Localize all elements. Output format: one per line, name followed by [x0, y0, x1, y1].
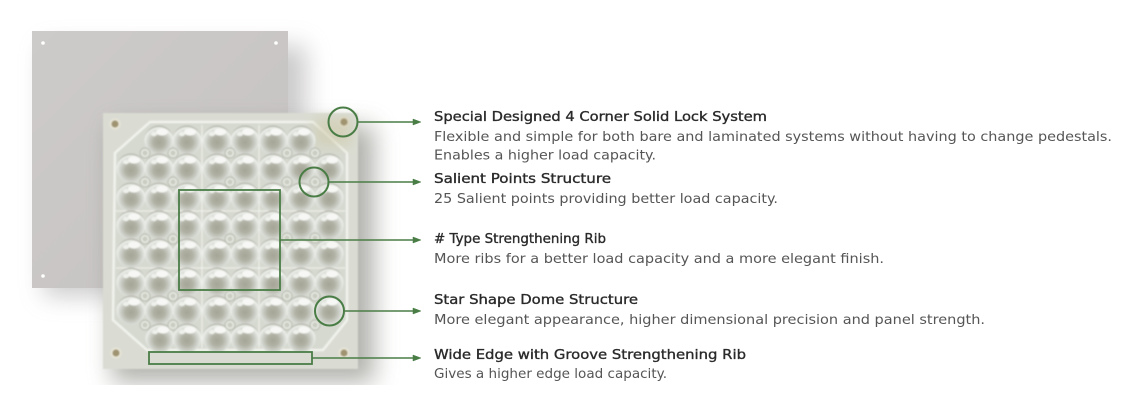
callout marker: edge rectangle and arrow: [149, 352, 421, 364]
text block: star shape dome: Star Shape Dome Structure: [434, 293, 638, 308]
callout marker: corner lock circle and arrow: [328, 108, 421, 136]
text block: wide edge: [434, 348, 746, 382]
corner lock holes: [110, 118, 348, 358]
salient points: [140, 148, 320, 330]
text block: corner lock system: [434, 110, 1112, 164]
text block: strengthening rib: [434, 232, 884, 267]
front panel photo: [103, 113, 374, 382]
callout marker: salient point circle and arrow: [300, 168, 421, 196]
back panel with shadow: [32, 31, 306, 296]
text block: corner lock system: Special Designed 4 Corner Solid Lock System: [434, 110, 767, 125]
text block: strengthening rib: # Type Strengthening Rib: [434, 232, 606, 247]
text block: wide edge: Gives a higher edge load capacity.: [434, 367, 667, 382]
text block: star shape dome: [434, 293, 985, 328]
text block: salient points: 25 Salient points providing better load capacity.: [434, 192, 778, 207]
text block: corner lock system: Flexible and simple for both bare and laminated systems without having to change pedestals.: [434, 130, 1112, 145]
text block: salient points: [434, 172, 778, 207]
callout marker: dome circle and arrow: [315, 296, 421, 326]
text block: strengthening rib: More ribs for a better load capacity and a more elegant finish.: [434, 252, 884, 267]
text block: star shape dome: More elegant appearance, higher dimensional precision and panel strength.: [434, 313, 985, 328]
text block: corner lock system: Enables a higher load capacity.: [434, 148, 656, 164]
callout marker: rib rectangle and arrow: [179, 190, 421, 290]
text block: salient points: Salient Points Structure: [434, 172, 611, 187]
text block: wide edge: Wide Edge with Groove Strengthening Rib: [434, 348, 746, 363]
domes: [116, 126, 344, 352]
